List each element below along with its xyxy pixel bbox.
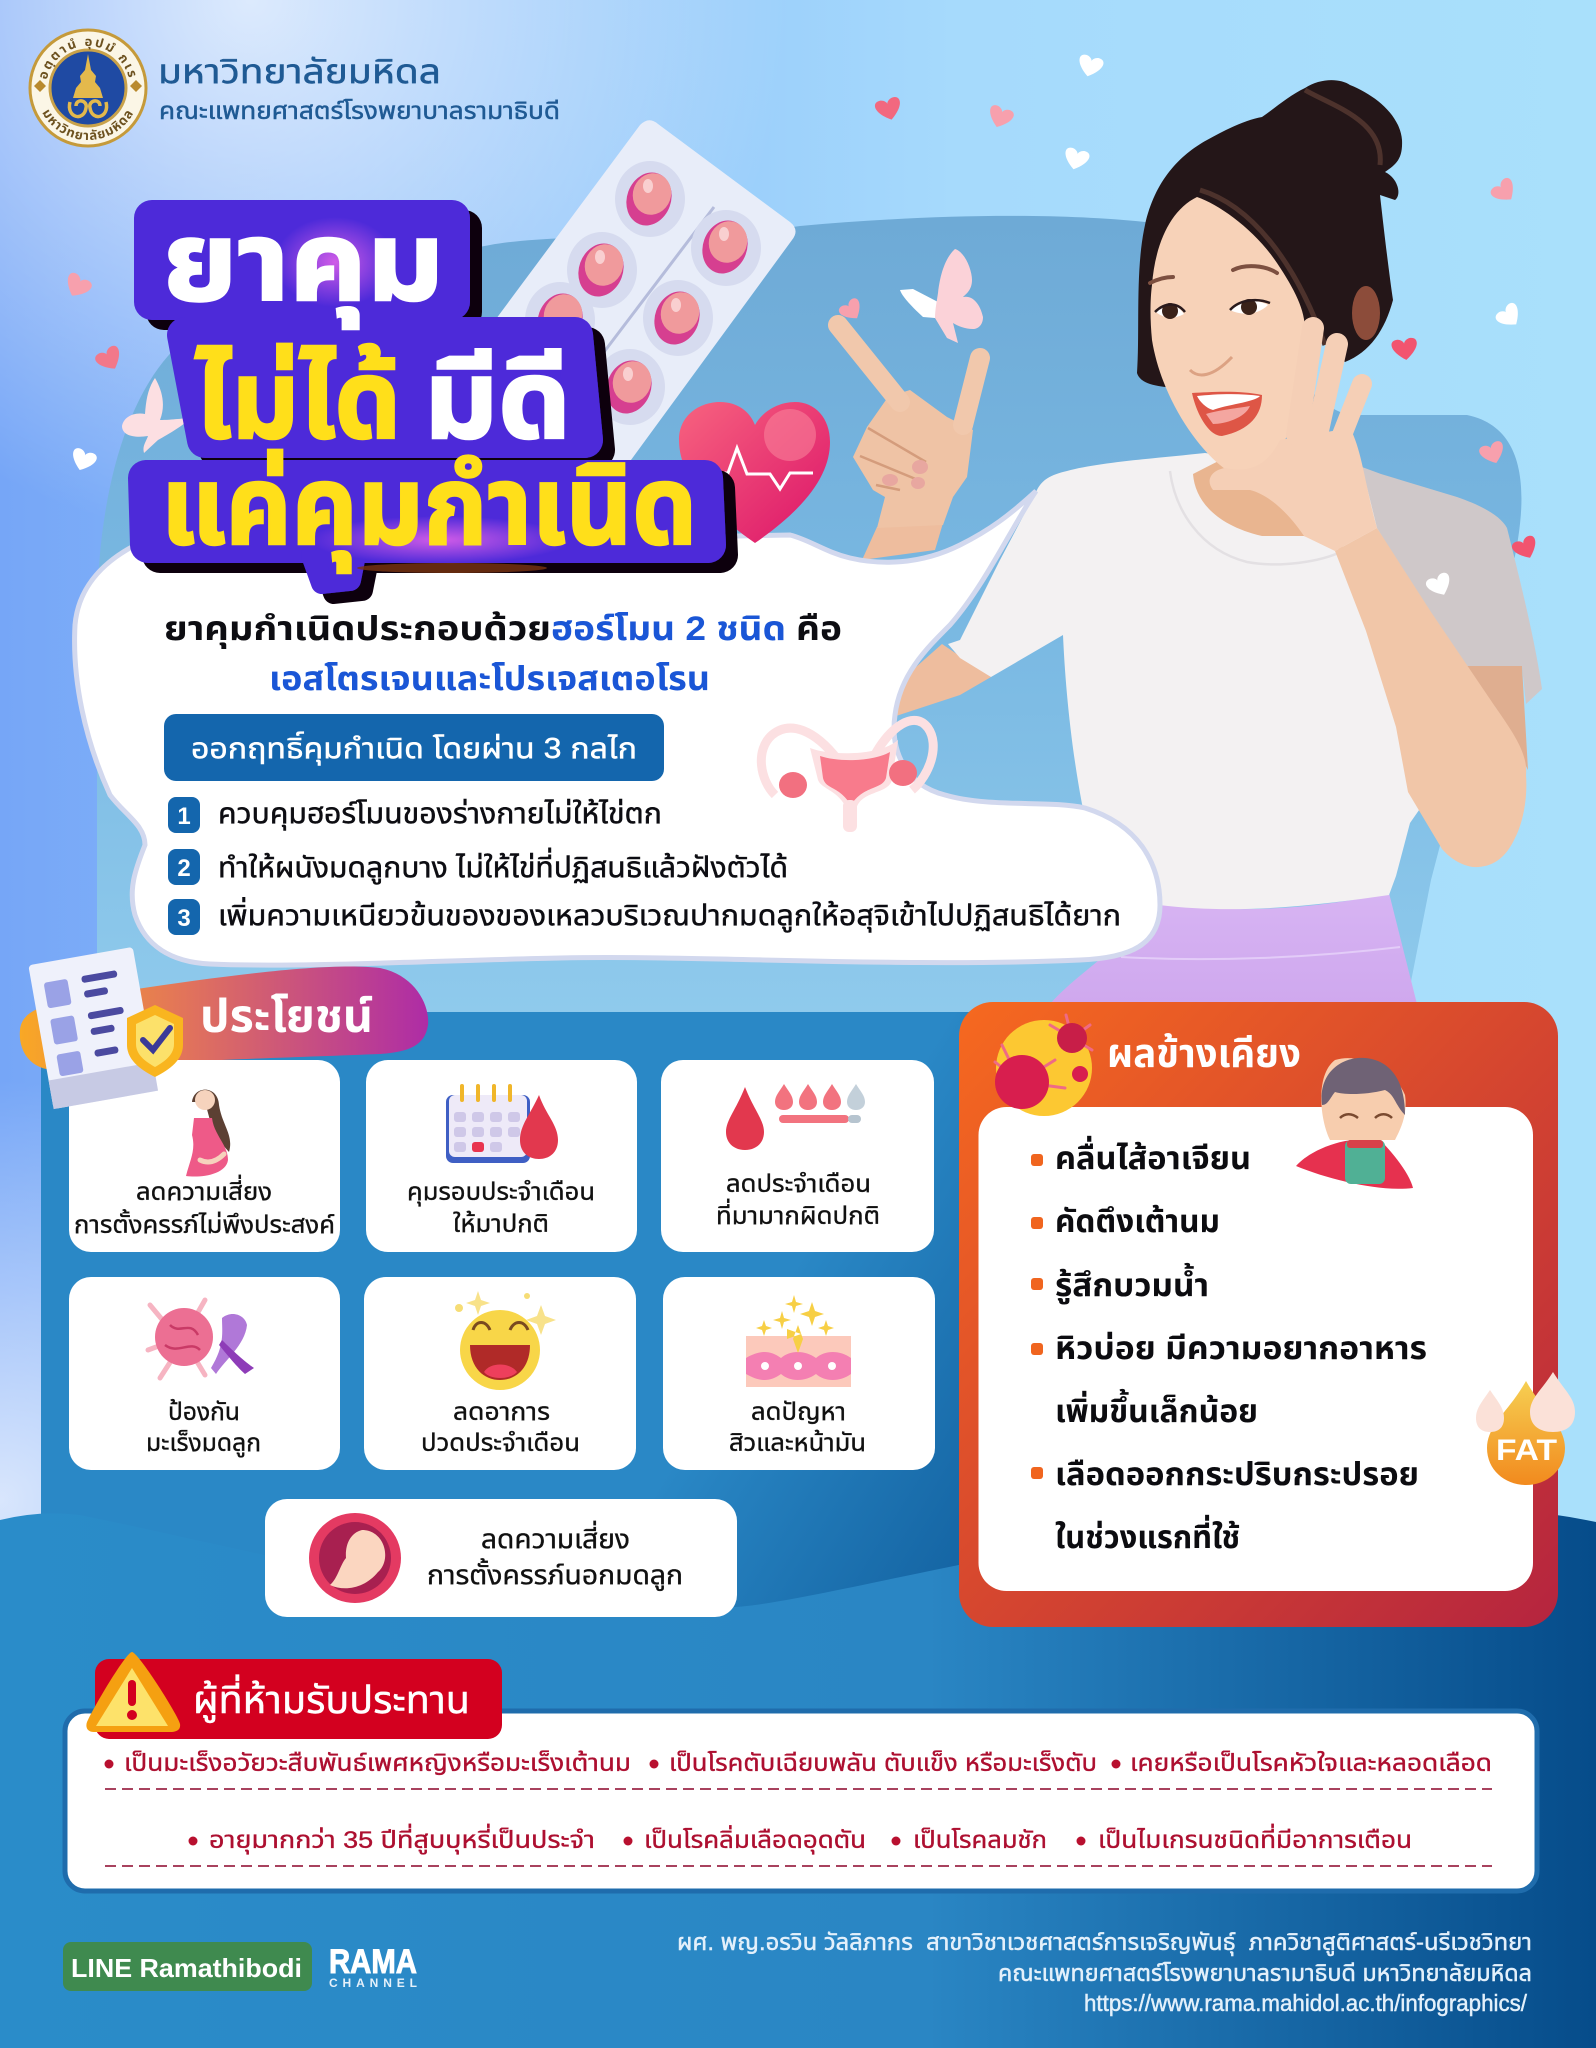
face <box>1150 197 1305 477</box>
RAMA channel logo: CHANNEL <box>329 1976 417 1990</box>
card 2: ให้มาปกติ <box>453 1210 549 1238</box>
contraindications row 2: เป็นโรคลิ่มเลือดอุดตัน <box>644 1824 866 1855</box>
effect 2: คัดตึงเต้านม <box>1055 1203 1220 1239</box>
side effects panel <box>959 1002 1575 1627</box>
LINE badge: LINE Ramathibodi <box>71 1953 302 1983</box>
title line 1: ยาคุม <box>163 201 444 329</box>
eyes and brows <box>1150 266 1277 375</box>
card 4: ป้องกัน <box>168 1398 240 1426</box>
contraindications row 1 <box>104 1749 1492 1777</box>
title line 2 white: มีดี <box>424 339 571 462</box>
raised hand <box>1210 328 1377 551</box>
mechanism 2: 2 <box>177 855 191 882</box>
icon: warning triangle <box>86 1652 180 1732</box>
university name <box>158 53 560 125</box>
shaded sleeve <box>1362 467 1542 704</box>
butterfly small <box>122 378 191 453</box>
icon: pregnant woman <box>186 1090 230 1177</box>
university logo: มหาวิทยาลัยมหิดล <box>42 110 133 140</box>
credits: https://www.rama.mahidol.ac.th/infographics/ <box>1084 1990 1528 2016</box>
white heart on sleeve <box>1424 571 1455 600</box>
card 6 <box>663 1277 935 1470</box>
blister pill pack <box>466 120 796 481</box>
floating hearts <box>61 53 1526 474</box>
card 2: คุมรอบประจำเดือน <box>407 1178 595 1207</box>
card 5: ปวดประจำเดือน <box>421 1429 580 1457</box>
university logo: อตฺตานํ อุปมํ กเร <box>40 38 136 79</box>
effect 4: หิวบ่อย มีความอยากอาหาร <box>1055 1330 1427 1366</box>
blue benefits panel background <box>0 1012 1596 2048</box>
mechanism 1: ควบคุมฮอร์โมนของร่างกายไม่ให้ไข่ตก <box>218 798 662 830</box>
hair <box>1137 80 1402 387</box>
card 6: สิวและหน้ามัน <box>729 1429 866 1457</box>
card 1: ลดความเสี่ยง <box>136 1174 272 1206</box>
speech bubble panel <box>75 491 1160 965</box>
neck <box>1193 450 1343 551</box>
woman model <box>837 80 1542 1004</box>
contraindications heading <box>95 1659 502 1739</box>
contraindications row 2 <box>188 1823 1412 1855</box>
card 3 <box>661 1060 934 1252</box>
card 7: ลดความเสี่ยง <box>481 1520 630 1554</box>
contraindications row 2: อายุมากกว่า 35 ปีที่สูบบุหรี่เป็นประจำ <box>209 1823 595 1855</box>
skirt <box>1050 893 1417 1004</box>
icon: fat drop <box>1476 1372 1575 1485</box>
card 7 <box>265 1499 737 1617</box>
card 6: ลดปัญหา <box>751 1398 846 1426</box>
side effects heading: ผลข้างเคียง <box>1107 1031 1301 1076</box>
benefits heading: ประโยชน์ <box>200 990 373 1042</box>
credits: คณะแพทยศาสตร์โรงพยาบาลรามาธิบดี มหาวิทยาลัยมหิดล <box>998 1960 1532 1986</box>
intro line 1: ยาคุมกำเนิดประกอบด้วย <box>164 610 551 649</box>
icon: blood drops <box>726 1084 865 1150</box>
benefits heading <box>20 967 428 1070</box>
effect 1: คลื่นไส้อาเจียน <box>1055 1135 1251 1176</box>
RAMA channel logo: RAMA <box>329 1943 417 1981</box>
card 5: ลดอาการ <box>453 1398 550 1426</box>
credits <box>677 1929 1532 2016</box>
contraindications row 2: เป็นไมเกรนชนิดที่มีอาการเตือน <box>1098 1823 1412 1854</box>
card 2 <box>366 1060 637 1252</box>
left upper arm <box>890 644 991 716</box>
icon: nauseous man <box>1296 1058 1413 1189</box>
mechanism 3: 3 <box>177 905 191 932</box>
pointing hand <box>838 325 980 560</box>
intro highlight: ฮอร์โมน 2 ชนิด <box>551 610 786 648</box>
title line 3: แค่คุมกำเนิด <box>161 445 697 573</box>
contraindications box <box>65 1711 1537 1891</box>
icon: happy face <box>455 1291 556 1390</box>
card 5 <box>364 1277 636 1470</box>
effect 5 <box>1031 1456 1419 1555</box>
t-shirt <box>948 453 1480 909</box>
background blue blob <box>97 216 1521 1012</box>
icon: document with shield <box>28 947 183 1109</box>
effect 3: รู้สึกบวมน้ำ <box>1055 1262 1209 1304</box>
contraindications row 2: เป็นโรคลมชัก <box>913 1827 1047 1854</box>
mechanism 3: เพิ่มความเหนียวข้นของของเหลวบริเวณปากมดลูกให้อสุจิเข้าไปปฏิสนธิได้ยาก <box>218 897 1121 933</box>
intro end word: คือ <box>796 610 842 648</box>
effect 5: ในช่วงแรกที่ใช้ <box>1055 1514 1240 1555</box>
mechanism heading: ออกฤทธิ์คุมกำเนิด โดยผ่าน 3 กลไก <box>191 732 637 765</box>
icon: virus <box>995 1015 1092 1116</box>
title glows <box>357 563 547 573</box>
contraindications row 1: เคยหรือเป็นโรคหัวใจและหลอดเลือด <box>1130 1750 1492 1777</box>
right forearm <box>1335 528 1526 867</box>
butterfly large <box>900 249 983 343</box>
card 4 <box>69 1277 340 1470</box>
collar <box>1170 471 1343 564</box>
title <box>146 201 708 583</box>
card 1 <box>69 1060 340 1252</box>
credits: ผศ. พญ.อรวิน วัลลิภากร สาขาวิชาเวชศาสตร์การเจริญพันธุ์ ภาควิชาสูติศาสตร์-นรีเวชวิทยา <box>677 1929 1532 1957</box>
upper right arm <box>1461 666 1528 770</box>
icon: embryo <box>309 1513 401 1603</box>
heart beside sleeve <box>1510 534 1541 563</box>
LINE badge <box>63 1942 312 1991</box>
mechanism heading <box>164 714 664 781</box>
effect 4: เพิ่มขึ้นเล็กน้อย <box>1055 1388 1258 1429</box>
university logo <box>28 28 148 148</box>
uterus icon <box>761 720 933 832</box>
card 3: ลดประจำเดือน <box>726 1170 871 1198</box>
ear <box>1352 286 1380 340</box>
icon: tumour and ribbon <box>148 1300 254 1378</box>
benefit cards <box>69 1060 935 1617</box>
card 7: การตั้งครรภ์นอกมดลูก <box>427 1558 683 1591</box>
emblem <box>73 54 103 98</box>
mechanism list <box>168 797 1121 935</box>
title line 2 yellow: ไม่ได้ <box>195 339 401 462</box>
icon: fat drop: FAT <box>1496 1434 1557 1467</box>
contraindications heading: ผู้ที่ห้ามรับประทาน <box>193 1674 470 1723</box>
side effects list card <box>978 1107 1533 1591</box>
card 3: ที่มามากผิดปกติ <box>716 1198 880 1230</box>
heart with pulse icon <box>679 402 830 543</box>
mechanism 2: ทำให้ผนังมดลูกบาง ไม่ให้ไข่ที่ปฏิสนธิแล้วฝังตัวได้ <box>218 847 788 885</box>
smiling mouth <box>1192 392 1262 436</box>
effect 4 <box>1031 1330 1427 1429</box>
contraindications row 1: เป็นมะเร็งอวัยวะสืบพันธ์เพศหญิงหรือมะเร็งเต้านม <box>124 1749 631 1777</box>
hair strands <box>1200 90 1380 345</box>
icon: healthy skin <box>746 1295 851 1387</box>
icon: calendar and drop <box>446 1086 558 1163</box>
card 4: มะเร็งมดลูก <box>146 1429 261 1458</box>
card 1: การตั้งครรภ์ไม่พึงประสงค์ <box>74 1208 335 1239</box>
title plates with shadow <box>146 218 708 583</box>
mechanism 1: 1 <box>177 803 191 830</box>
effect 5: เลือดออกกระปริบกระปรอย <box>1055 1456 1419 1492</box>
heart on fingertip <box>837 296 866 325</box>
intro line 2: เอสโตรเจนและโปรเจสเตอโรน <box>269 660 710 698</box>
university name: มหาวิทยาลัยมหิดล <box>158 53 441 91</box>
contraindications row 1: เป็นโรคตับเฉียบพลัน ตับแข็ง หรือมะเร็งตับ <box>669 1749 1097 1777</box>
intro text <box>164 610 842 698</box>
university name: คณะแพทยศาสตร์โรงพยาบาลรามาธิบดี <box>159 98 560 125</box>
